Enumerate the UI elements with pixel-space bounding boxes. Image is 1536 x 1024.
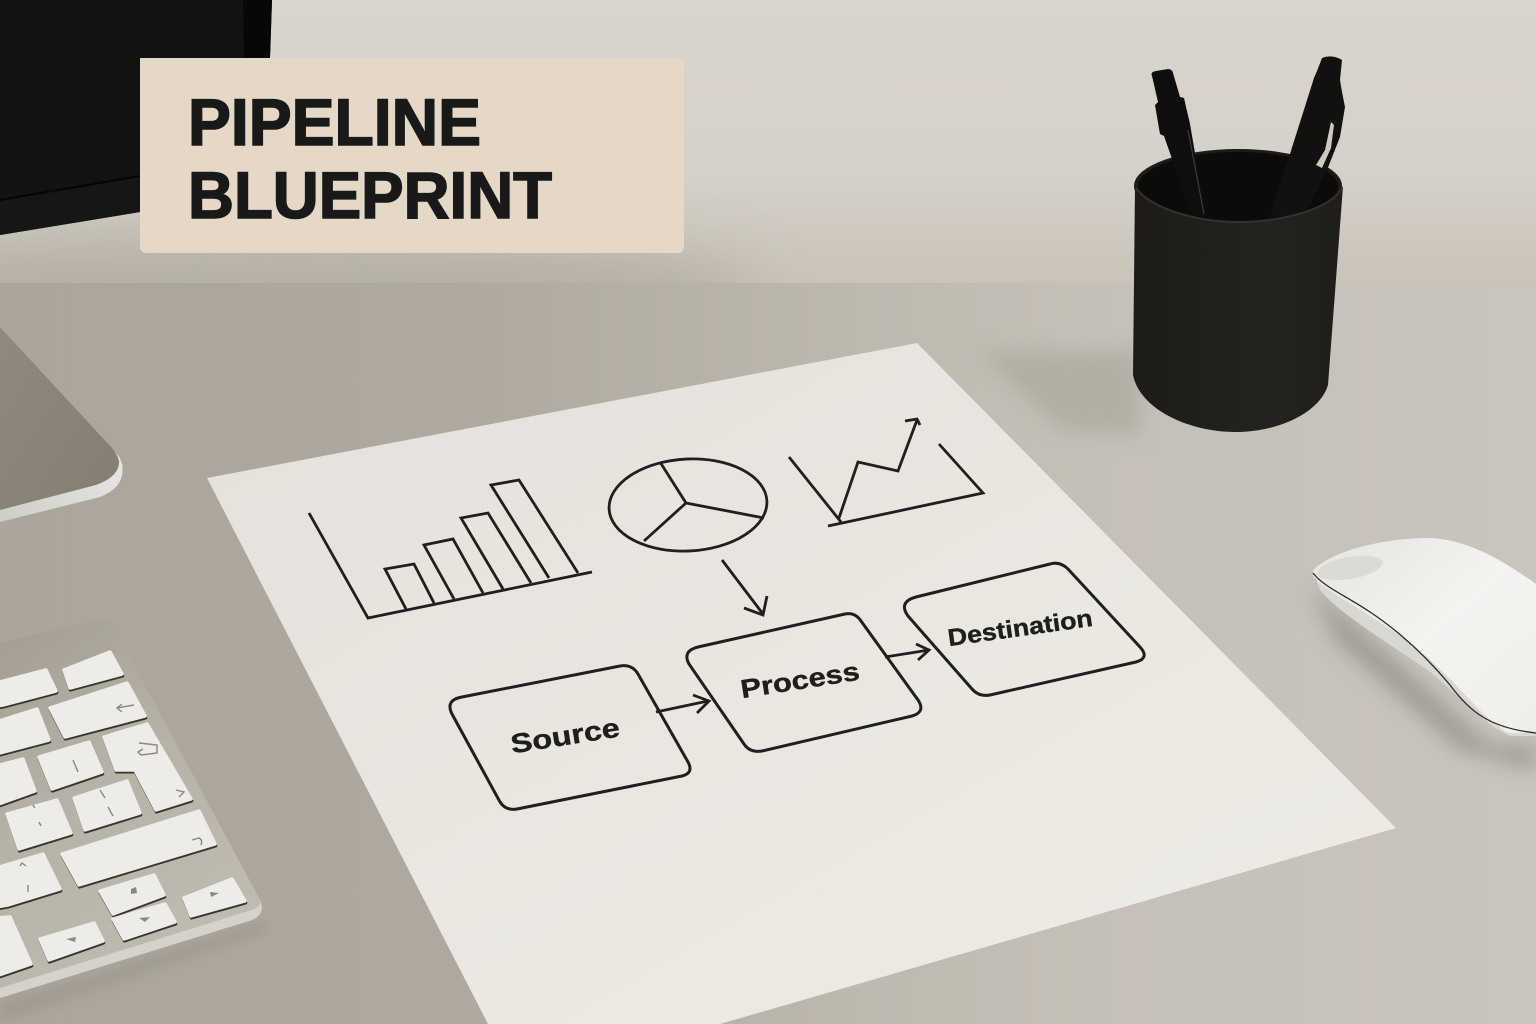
bar 1: [385, 564, 434, 609]
bar 2: [424, 539, 483, 599]
keys: [0, 652, 245, 976]
arrow: process to destination: [885, 644, 929, 660]
title text: BLUEPRINT: [188, 158, 552, 232]
arrow: chart to process: [722, 560, 767, 615]
bar 4: [491, 480, 578, 578]
mouse: [1313, 538, 1536, 736]
paper sheet: [207, 343, 1396, 1024]
wall: [0, 0, 1536, 283]
title text: PIPELINE: [188, 85, 481, 159]
trend arrow: [839, 419, 920, 518]
source label: Source: [508, 713, 622, 759]
pen clip gap: [1316, 122, 1334, 168]
title panel: [140, 58, 684, 253]
arrow: source to process: [656, 695, 709, 713]
pen holder: [1133, 56, 1345, 432]
title text: [188, 85, 552, 232]
source box: [450, 666, 690, 809]
pen cup shadow: [980, 350, 1140, 436]
destination box: [904, 563, 1144, 695]
keyboard: [0, 619, 270, 1020]
laptop: [0, 327, 123, 522]
left pen: [1152, 69, 1206, 217]
pie chart: [607, 455, 769, 555]
monitor: [0, 0, 272, 235]
destination label: Destination: [946, 605, 1094, 652]
line chart: [789, 419, 983, 526]
cup interior: [1138, 152, 1338, 222]
mouse shadow: [1310, 585, 1536, 770]
process label: Process: [738, 656, 862, 704]
bar chart: [309, 480, 592, 618]
bar 3: [461, 513, 531, 589]
wall shading: [0, 219, 736, 283]
key edges: [0, 654, 246, 978]
back of cup: [1134, 149, 1342, 223]
key glyphs: [20, 704, 202, 892]
desk surface: [0, 283, 1536, 1024]
process box: [687, 614, 921, 751]
keyboard body: [0, 619, 262, 998]
cup body: [1133, 186, 1343, 432]
right pen: [1270, 56, 1345, 217]
keyboard shadow: [0, 922, 270, 1020]
